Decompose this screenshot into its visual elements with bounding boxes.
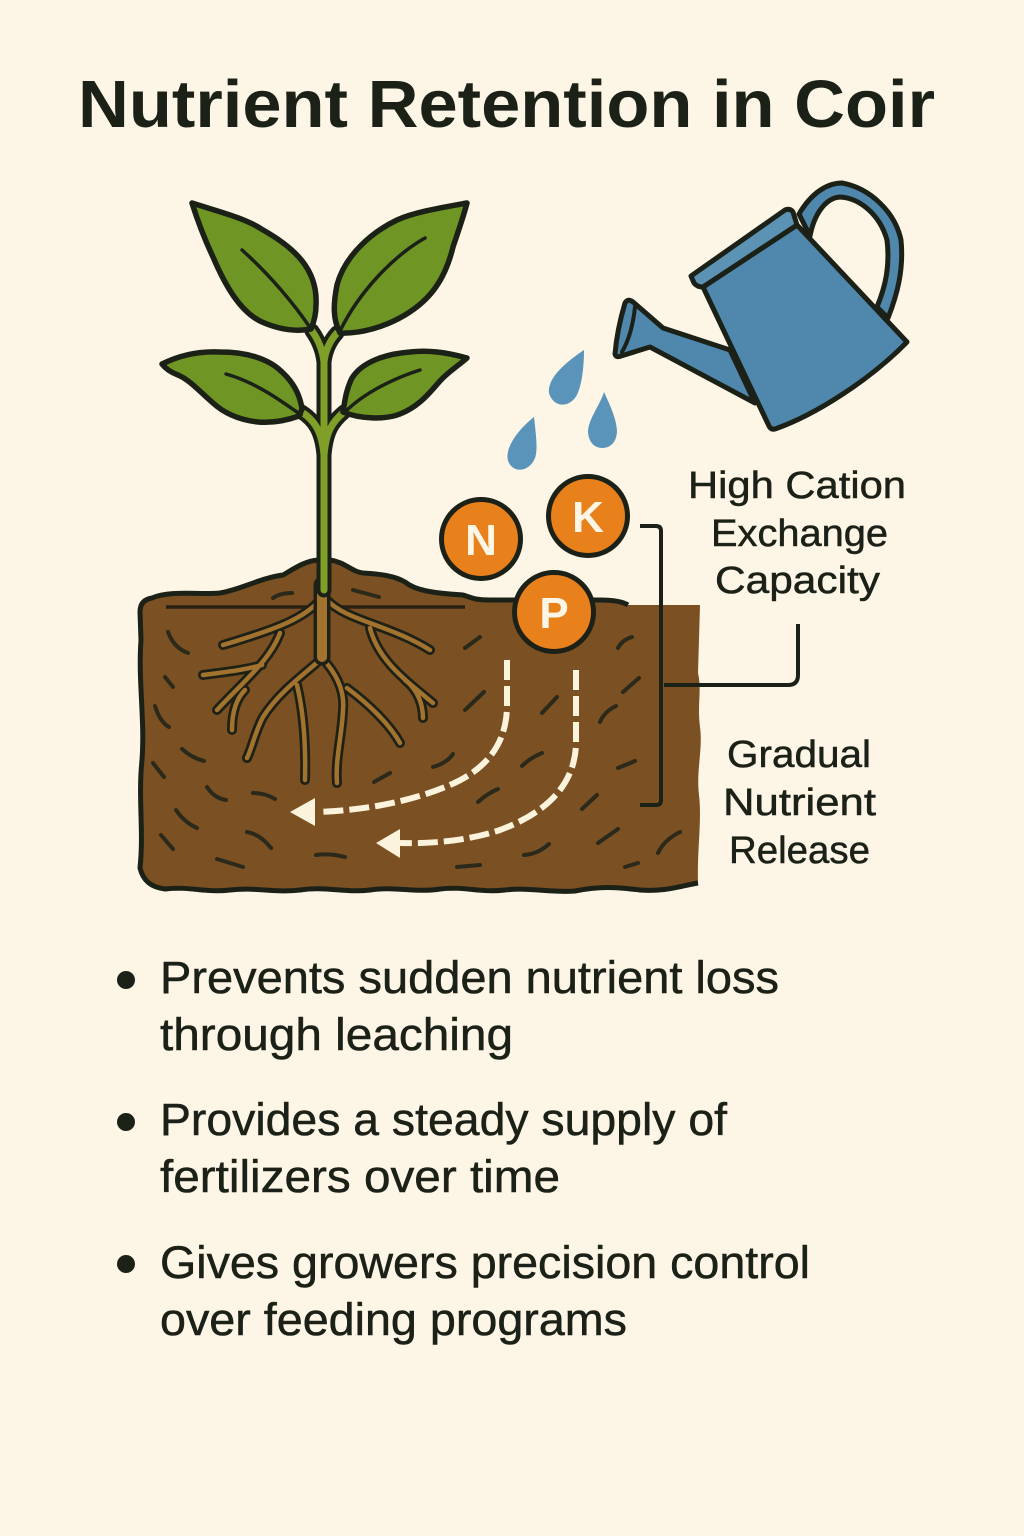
soil surface line [166,605,465,609]
spout rose line [622,307,635,352]
icon: water drop 1 [549,350,584,405]
arrowhead: lower [376,829,400,858]
can handle [799,183,902,318]
soil body [140,560,701,891]
nutrient P: P [539,589,569,638]
soil outline [140,560,698,891]
dashed arrow: lower [400,670,576,843]
can rim [691,209,797,287]
leaf: top right [334,203,467,333]
bullet 1 [117,952,779,1060]
label: gradual nutrient release: Nutrient [723,782,877,824]
leaf: top left [192,203,316,330]
label: gradual nutrient release: Gradual [727,734,871,776]
leaf: lower right [343,351,467,418]
bullet 1: through leaching [160,1009,513,1060]
label: high cation exchange capacity: High Cation [688,465,906,507]
dashed arrow: upper [318,660,507,812]
nutrient P [514,572,594,652]
nutrient K: K [572,493,604,542]
label: high cation exchange capacity [688,465,906,602]
bullet 2: fertilizers over time [160,1151,560,1202]
leaf vein: lower right [345,370,420,412]
leaf vein: lower left [226,374,301,415]
nutrient K [548,476,628,556]
bullet 1: Prevents sudden nutrient loss [160,952,779,1003]
label: high cation exchange capacity: Exchange [711,513,888,555]
label: gradual nutrient release [723,734,877,872]
arrowhead: upper [290,798,315,826]
icon: water drop 3 [507,417,537,470]
roots [203,585,433,783]
bullet 3: Gives growers precision control [160,1237,810,1288]
stem outline [300,331,344,590]
title: Nutrient Retention in Coir [78,67,935,142]
soil fibre marks [153,590,680,867]
icon: water drop 2 [588,392,617,448]
label: gradual nutrient release: Release [729,830,870,872]
nutrient N [442,500,520,578]
leaf vein: top left [242,250,311,329]
can body [703,225,907,429]
icon: watering can [615,183,907,429]
bullet 3 [117,1237,810,1345]
bullet 2 [117,1094,728,1202]
leaf vein: top right [340,238,425,331]
stem fill [300,331,344,590]
bullet list [117,952,810,1345]
panel: soil cross-section [140,560,701,891]
bullet 3: over feeding programs [160,1294,627,1345]
can spout [615,300,755,403]
nutrient N: N [465,516,497,565]
leaf: lower left [162,352,302,422]
nutrient release arrows [290,660,576,858]
callout connector lines [640,526,798,805]
plant [162,203,467,783]
label: high cation exchange capacity: Capacity [715,560,880,602]
bullet 2: Provides a steady supply of [160,1094,728,1145]
